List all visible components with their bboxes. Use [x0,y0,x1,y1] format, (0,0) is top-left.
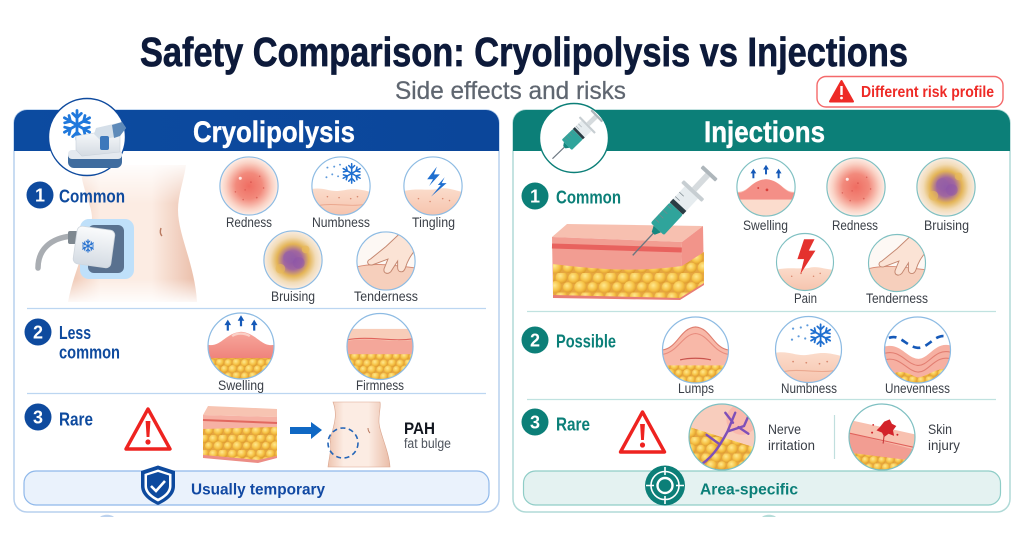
row 1 badge: common [522,182,621,210]
row 2 badge: less common [24,318,120,362]
symptom: bruising: Bruising [271,289,315,304]
callout: usually temporary [24,466,489,505]
symptom: pain [776,234,834,306]
illustration: torso with fat bulge [328,402,390,467]
symptom: swelling: Swelling [218,378,264,393]
symptom: tingling [404,157,462,230]
illustration: abdomen with applicator [38,165,197,302]
row 3 badge: rare [24,404,93,430]
symptom: tenderness: Tenderness [866,291,928,306]
row 2 badge: less common: 2 [33,322,43,342]
panel: injections [513,104,1010,512]
symptom: swelling [737,158,795,233]
row 3 badge: rare: 3 [530,412,540,432]
symptom: lumps [662,317,728,396]
row 3 badge: rare [522,408,590,436]
row 1 badge: common [26,182,125,208]
symptom: unevenness [884,317,950,396]
callout: usually temporary: Usually temporary [191,482,325,498]
symptom: firmness [347,314,413,393]
row 2 badge: possible [522,326,616,354]
row 2 badge: less common: common [59,342,120,362]
illustration: skin and fat block [203,406,277,463]
symptom: numbness [312,157,370,230]
heading: injections: Injections [704,116,825,149]
panel header: injections [513,110,1010,151]
risk: skin injury [847,404,960,472]
symptom: bruising: Bruising [924,218,969,233]
icon: warning triangle [620,412,664,452]
badge: different risk profile [817,76,1003,107]
risk: skin injury: injury [928,438,960,453]
callout: area-specific [524,466,1000,506]
label: PAH fat bulge: PAH [404,419,435,438]
symptom: numbness: Numbness [781,381,837,396]
symptom: unevenness: Unevenness [885,381,950,396]
risk: skin injury: Skin [928,422,952,437]
row 2 badge: less common: Less [59,323,91,343]
symptom: numbness [776,316,842,396]
row 1 badge: common: Common [59,186,125,206]
risk: nerve irritation: irritation [768,438,815,453]
subtitle: Side effects and risks [395,77,626,105]
symptom: redness [220,157,278,230]
icon: cooling device [48,98,126,176]
symptom: swelling: Swelling [743,218,788,233]
symptom: redness [827,158,885,233]
illustration: skin block with syringe [552,162,721,300]
row 3 badge: rare: Rare [59,410,93,430]
risk: nerve irritation: Nerve [768,422,801,437]
symptom: firmness: Firmness [356,378,404,393]
panel: cryolipolysis [14,98,499,512]
symptom: bruising [264,231,322,304]
row 1 badge: common: 1 [530,186,540,206]
symptom: redness: Redness [226,215,272,230]
icon: syringe [540,104,608,172]
row 1 badge: common: Common [556,186,621,208]
row 2 badge: possible: Possible [556,332,616,352]
symptom: swelling [208,313,274,393]
callout: area-specific: Area-specific [700,482,798,498]
heading: cryolipolysis: Cryolipolysis [193,116,355,149]
row 3 badge: rare: Rare [556,414,590,434]
symptom: pain: Pain [794,291,817,306]
risk: nerve irritation [687,404,815,474]
row 2 badge: possible: 2 [530,330,540,350]
panel header: cryolipolysis [14,110,499,151]
symptom: tenderness [354,232,418,304]
symptom: bruising [917,158,975,233]
label: PAH fat bulge: fat bulge [404,436,451,451]
symptom: tingling: Tingling [412,215,455,230]
icon: warning triangle [126,409,170,449]
symptom: numbness: Numbness [312,215,370,230]
badge: different risk profile: Different risk profile [861,84,994,101]
symptom: tenderness: Tenderness [354,289,418,304]
row 3 badge: rare: 3 [33,408,43,428]
symptom: redness: Redness [832,218,878,233]
row 1 badge: common: 1 [35,186,45,206]
symptom: lumps: Lumps [678,381,714,396]
label: PAH fat bulge [404,419,451,451]
symptom: tenderness [866,234,928,306]
arrow: progression to bulge [290,422,322,439]
